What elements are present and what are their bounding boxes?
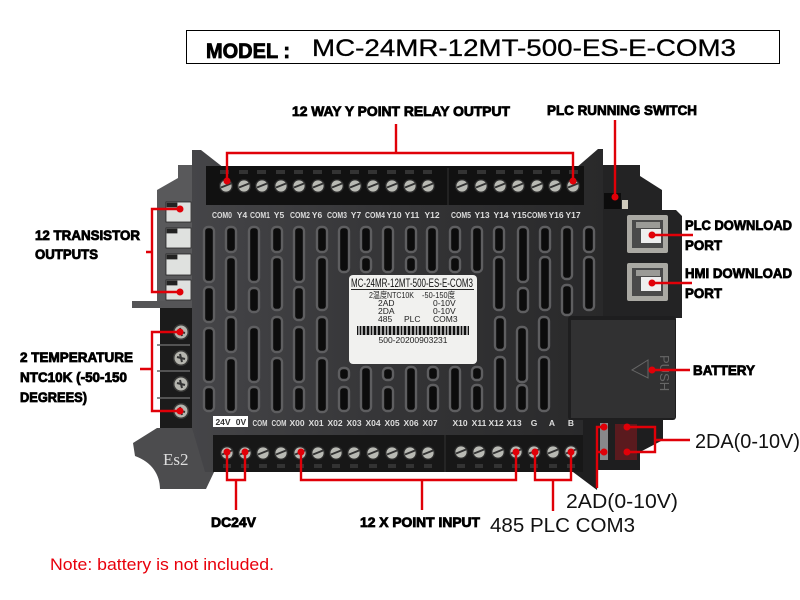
product label sticker: 0-10V bbox=[433, 306, 456, 316]
product label sticker: 2温度NTC10K bbox=[369, 290, 414, 300]
top terminal labels: Y17 bbox=[565, 210, 581, 220]
485 leader bbox=[532, 448, 574, 511]
product label sticker: 0-10V bbox=[433, 298, 456, 308]
top terminal labels: Y13 bbox=[474, 210, 490, 220]
running switch leader bbox=[612, 120, 618, 200]
heading: temperature bbox=[20, 349, 133, 405]
bottom terminal labels: X11 bbox=[472, 418, 487, 428]
heading: transistor outputs bbox=[35, 227, 140, 262]
model title box: MODEL : bbox=[206, 40, 290, 63]
left output module housing bbox=[157, 165, 195, 302]
bottom terminal labels: A bbox=[549, 418, 555, 428]
bottom terminal labels: G bbox=[531, 418, 538, 428]
main body bbox=[192, 149, 603, 472]
bottom terminal labels: X12 bbox=[488, 418, 504, 428]
top terminal labels: COM5 bbox=[451, 210, 471, 220]
temperature terminal block bbox=[157, 308, 192, 430]
ventilation slots bbox=[204, 227, 594, 412]
transistor output connectors bbox=[166, 202, 191, 300]
bottom terminal labels: X04 bbox=[365, 418, 381, 428]
model title box: MC-24MR-12MT-500-ES-E-COM3 bbox=[312, 35, 736, 62]
bottom terminal labels: B bbox=[568, 418, 574, 428]
product label sticker: -50-150度 bbox=[422, 290, 455, 300]
heading: 2AD: 2AD(0-10V) bbox=[566, 491, 678, 513]
product label sticker bbox=[349, 275, 477, 364]
bottom terminal labels: X05 bbox=[384, 418, 400, 428]
heading: temperature: DEGREES) bbox=[20, 389, 87, 405]
USB port: HMI download bbox=[627, 263, 668, 301]
heading: HMI download port bbox=[685, 265, 792, 301]
battery leader bbox=[648, 366, 690, 374]
bottom terminal labels: X01 bbox=[308, 418, 324, 428]
top terminal labels: Y14 bbox=[493, 210, 509, 220]
transistor leader bbox=[146, 206, 184, 296]
heading: transistor outputs: 12 TRANSISTOR bbox=[35, 227, 140, 243]
heading: DC24V: DC24V bbox=[211, 514, 257, 530]
right module housing bbox=[600, 165, 682, 318]
temperature leader bbox=[140, 328, 184, 414]
battery cover bbox=[568, 316, 676, 420]
heading: running switch: PLC RUNNING SWITCH bbox=[547, 102, 697, 118]
bottom terminal labels: COM bbox=[272, 418, 286, 428]
product label sticker: 485 bbox=[378, 314, 392, 324]
USB port: PLC download bbox=[627, 215, 668, 253]
top terminal labels: COM4 bbox=[365, 210, 385, 220]
top terminal labels: COM6 bbox=[527, 210, 547, 220]
heading: PLC download port: PLC DOWNLOAD bbox=[685, 217, 792, 233]
top terminal labels: Y7 bbox=[351, 210, 361, 220]
heading: PLC download port bbox=[685, 217, 792, 253]
product label sticker: MC-24MR-12MT-500-ES-E-COM3 bbox=[351, 276, 473, 290]
bottom terminal labels: X13 bbox=[506, 418, 522, 428]
top terminal labels: Y6 bbox=[312, 210, 322, 220]
bottom terminal labels: X06 bbox=[403, 418, 419, 428]
product label sticker: COM3 bbox=[433, 314, 458, 324]
top terminal labels: COM1 bbox=[250, 210, 270, 220]
USB leaders bbox=[648, 232, 693, 286]
top terminal labels: Y15 bbox=[511, 210, 527, 220]
heading: 2DA: 2DA(0-10V) bbox=[695, 431, 800, 453]
top terminal labels: Y10 bbox=[386, 210, 402, 220]
analog connector block bbox=[573, 418, 663, 490]
top terminal labels: Y11 bbox=[405, 210, 420, 220]
relay output leader bbox=[224, 124, 576, 184]
2AD leader bbox=[597, 424, 608, 488]
bottom terminal labels: 0V bbox=[236, 417, 247, 427]
bottom terminal labels: X07 bbox=[422, 418, 438, 428]
heading: HMI download port: PORT bbox=[685, 285, 722, 301]
top terminal labels: Y4 bbox=[237, 210, 247, 220]
X input leader bbox=[298, 448, 520, 510]
top terminal strip bbox=[206, 166, 584, 205]
product label sticker: 2AD bbox=[378, 298, 395, 308]
heading: relay output: 12 WAY Y POINT RELAY OUTPUT bbox=[292, 103, 510, 119]
top terminal labels: Y5 bbox=[274, 210, 284, 220]
DC24V leader bbox=[224, 448, 248, 510]
red callout lines bbox=[140, 120, 693, 511]
bottom terminal labels: X02 bbox=[327, 418, 343, 428]
heading: battery: BATTERY bbox=[693, 362, 756, 378]
bottom terminal labels: X03 bbox=[346, 418, 362, 428]
battery cover: PUSH bbox=[657, 355, 672, 391]
bottom terminal labels: COM bbox=[252, 418, 268, 428]
top terminal labels: COM3 bbox=[327, 210, 347, 220]
heading: transistor outputs: OUTPUTS bbox=[35, 246, 98, 262]
top terminal labels: Y12 bbox=[424, 210, 440, 220]
bottom terminal labels: 24V bbox=[215, 417, 231, 427]
switch bbox=[604, 193, 628, 209]
bottom terminal labels bbox=[213, 416, 574, 428]
bottom terminal labels: X00 bbox=[289, 418, 305, 428]
foot with Es2 mark: Es2 bbox=[163, 450, 188, 469]
bottom terminal labels: X10 bbox=[452, 418, 468, 428]
product label sticker: 500-20200903231 bbox=[378, 335, 448, 345]
2DA leader bbox=[624, 424, 690, 456]
mounting flange bbox=[132, 301, 192, 308]
barcode bbox=[357, 326, 469, 335]
heading: temperature: 2 TEMPERATURE bbox=[20, 349, 133, 365]
heading: 485: 485 PLC COM3 bbox=[490, 515, 635, 537]
heading: X point input: 12 X POINT INPUT bbox=[360, 514, 480, 530]
heading: PLC download port: PORT bbox=[685, 237, 722, 253]
product label sticker: 2DA bbox=[378, 306, 395, 316]
top terminal labels: Y16 bbox=[548, 210, 564, 220]
heading: HMI download port: HMI DOWNLOAD bbox=[685, 265, 792, 281]
top terminal labels bbox=[212, 210, 581, 220]
heading: temperature: NTC10K (-50-150 bbox=[20, 369, 127, 385]
PLC device bbox=[132, 149, 682, 490]
product label sticker: PLC bbox=[404, 314, 421, 324]
top terminal labels: COM0 bbox=[212, 210, 232, 220]
model title box bbox=[186, 30, 780, 64]
note: Note: battery is not included. bbox=[50, 555, 274, 574]
bottom terminal strip bbox=[213, 435, 583, 472]
top terminal labels: COM2 bbox=[290, 210, 310, 220]
foot with Es2 mark bbox=[133, 428, 215, 489]
